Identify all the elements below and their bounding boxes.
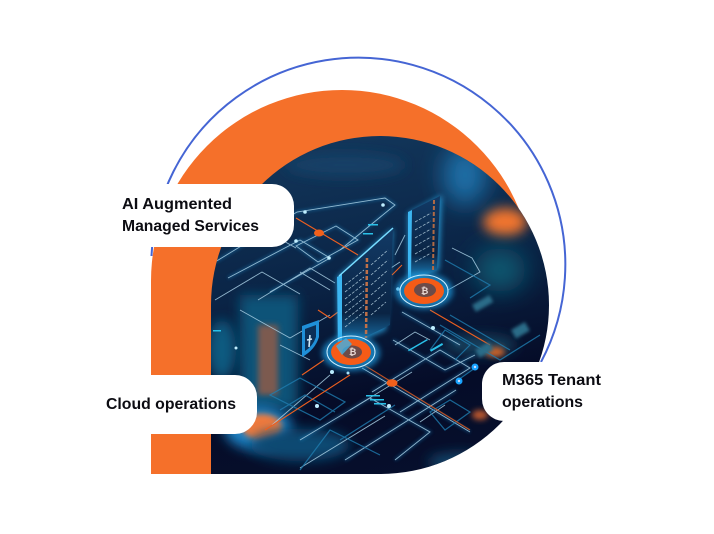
infographic <box>106 56 601 474</box>
label: Cloud operations: Cloud operations <box>106 396 236 413</box>
data panel right <box>408 195 442 281</box>
photo: circuit board <box>208 136 549 474</box>
shield icon <box>302 320 319 357</box>
label: AI Augmented Managed Services <box>104 184 294 247</box>
coin disc right <box>395 273 453 309</box>
label: AI Augmented Managed Services: AI Augmented <box>122 196 232 213</box>
label: M365 Tenant operations <box>482 362 630 421</box>
label: Cloud operations <box>88 375 257 434</box>
small cyan dot grids <box>213 224 443 404</box>
label: M365 Tenant operations: M365 Tenant <box>502 372 601 389</box>
coin disc left: ₿ <box>349 347 356 357</box>
label: AI Augmented Managed Services: Managed Services <box>122 218 259 235</box>
blue ring arc <box>152 58 565 362</box>
orange arch backdrop <box>151 90 533 474</box>
blurred background glows <box>208 145 527 471</box>
label: M365 Tenant operations: operations <box>502 394 583 411</box>
circuit line glow <box>215 198 475 460</box>
circuit nodes <box>234 203 435 408</box>
data panel left <box>337 228 393 351</box>
orange traces <box>265 218 490 430</box>
blurred chips <box>472 295 530 358</box>
coin disc right: ₿ <box>421 286 428 296</box>
orange nodes <box>314 230 324 236</box>
circuit lines <box>212 198 480 468</box>
coin disc left <box>322 335 380 371</box>
